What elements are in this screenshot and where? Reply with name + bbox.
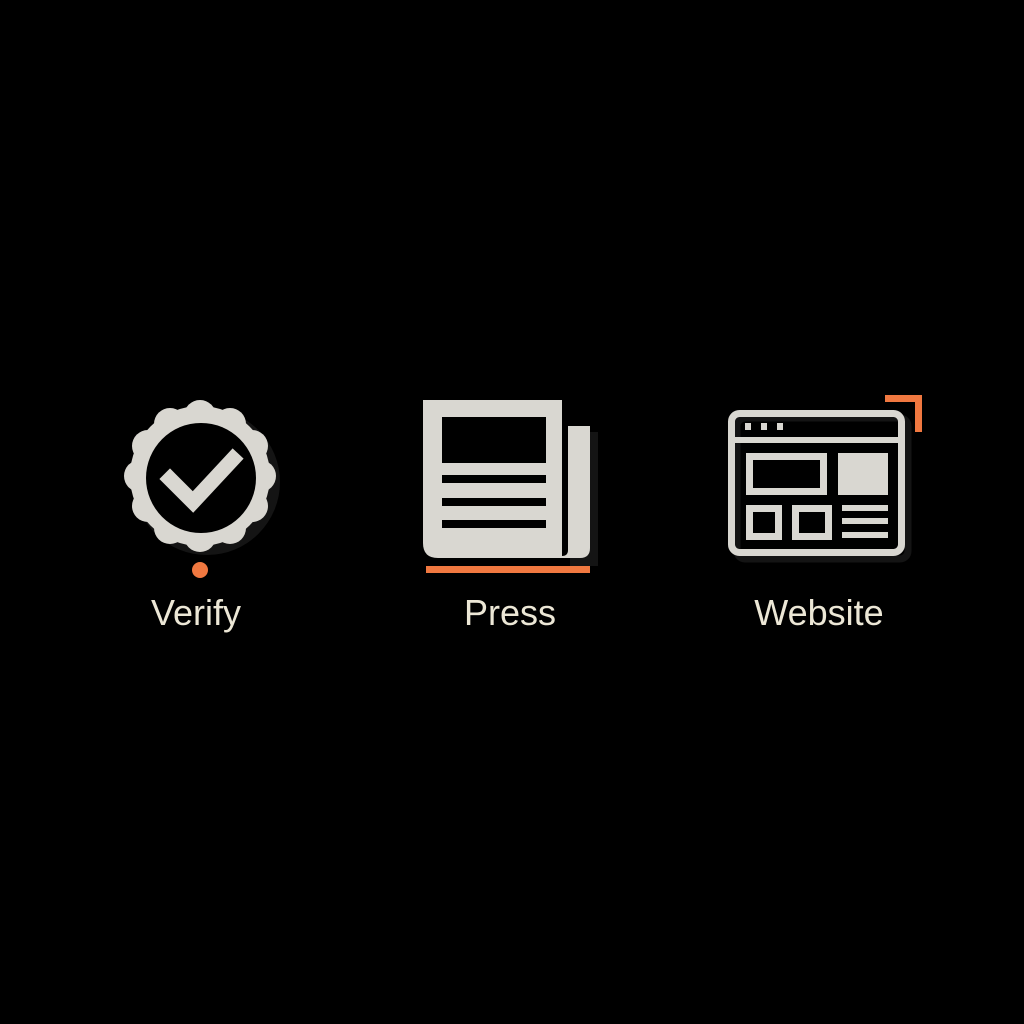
label: Verify: Verify <box>151 592 241 633</box>
icon: website <box>731 395 922 559</box>
icon: verify badge <box>124 400 280 578</box>
label: Website: Website <box>754 592 884 633</box>
label: Press: Press <box>464 592 556 633</box>
icon: newspaper <box>423 400 598 573</box>
